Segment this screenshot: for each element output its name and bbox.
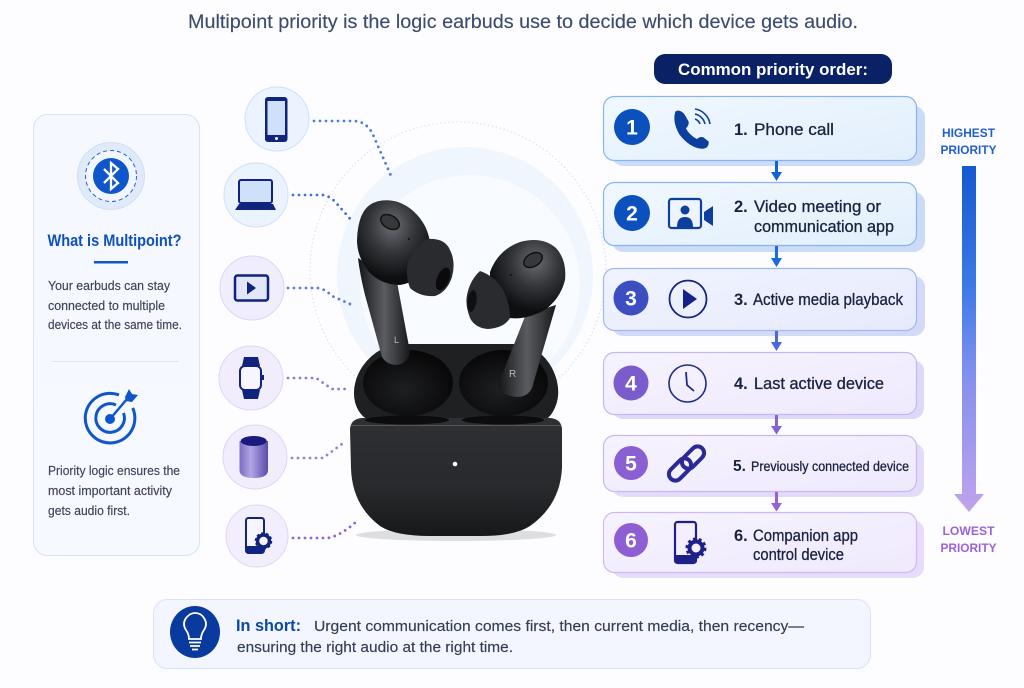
label: lowest priority: PRIORITY [940, 541, 996, 555]
card 1: phone call: 1 [626, 116, 638, 140]
left earbud: L [394, 335, 399, 345]
card 3: active media: 3 [625, 288, 637, 310]
card 3: active media [604, 268, 925, 336]
halo behind earbuds [310, 122, 606, 418]
text: multipoint description: devices at the same time. [48, 318, 182, 332]
card 5: previously connected: 5. [733, 458, 746, 475]
card 2: video meeting: communication app [754, 218, 894, 236]
icon: play [670, 280, 706, 318]
card 6: companion app: Companion app [753, 527, 858, 545]
card 5: previously connected: 5 [625, 452, 637, 476]
icon: app control [226, 505, 288, 567]
arrow 4-5 [771, 415, 782, 434]
card 5: previously connected [604, 436, 924, 497]
text: priority logic description: Priority logic ensures the [48, 464, 180, 478]
card 2: video meeting [604, 182, 925, 252]
right earbud: R [509, 369, 516, 380]
callout: in short: ensuring the right audio at the right time. [237, 640, 513, 656]
label: highest priority: PRIORITY [940, 143, 996, 157]
icon: app settings [675, 522, 705, 563]
right earbud [466, 240, 565, 397]
icon: light bulb [170, 606, 220, 658]
icon: link [666, 444, 707, 483]
case body [350, 416, 562, 536]
text: priority logic description: gets audio first. [48, 504, 130, 518]
case lid interior [354, 344, 558, 420]
case shadow [356, 529, 556, 541]
text: multipoint description [48, 279, 182, 332]
panel: what is multipoint [34, 114, 200, 556]
card 4: last active: 4 [625, 372, 637, 396]
dotted connectors [288, 121, 392, 538]
label: highest priority: HIGHEST [942, 126, 996, 140]
card 3: active media: Active media playback [753, 291, 904, 309]
card 1: phone call: 1. [734, 121, 748, 139]
text: priority logic description: most important activity [48, 484, 173, 498]
label: lowest priority [940, 524, 996, 555]
illustration: earbuds and case [350, 200, 565, 541]
callout: in short [154, 600, 870, 668]
card 1: phone call [604, 96, 925, 166]
card 1: phone call: Phone call [754, 121, 834, 139]
icon: video meeting [669, 199, 713, 228]
card 6: companion app [604, 512, 924, 578]
callout: in short: In short: [236, 617, 301, 635]
heading pill: common priority order: Common priority order: [678, 61, 868, 79]
card 6: companion app: 6. [734, 527, 748, 545]
left earbud [357, 200, 454, 365]
card 4: last active: 4. [734, 375, 748, 393]
card 2: video meeting: 2. [734, 198, 748, 216]
icon: phone call [675, 109, 710, 148]
card 6: companion app: control device [753, 546, 844, 564]
priority scale [940, 126, 996, 555]
icon: phone [245, 87, 309, 151]
label: highest priority [940, 126, 996, 157]
heading pill: common priority order [654, 54, 892, 84]
card 4: last active: Last active device [754, 375, 884, 393]
arrow: priority gradient [954, 166, 984, 512]
card 5: previously connected: Previously connected device [751, 458, 909, 474]
icon: bluetooth [78, 142, 144, 210]
device icons [219, 87, 309, 567]
label: lowest priority: LOWEST [942, 524, 995, 538]
card 2: video meeting: 2 [626, 202, 638, 226]
card 4: last active [604, 352, 924, 419]
arrow 5-6 [771, 492, 782, 512]
card 3: active media: 3. [734, 291, 748, 309]
arrow 2-3 [771, 246, 782, 267]
icon: watch [219, 346, 283, 410]
heading: what is multipoint: What is Multipoint? [48, 232, 182, 250]
card 2: video meeting: Video meeting or [754, 198, 882, 216]
title: Multipoint priority is the logic earbuds use to decide which device gets audio. [188, 11, 858, 33]
icon: clock [669, 365, 706, 402]
card 6: companion app: 6 [625, 530, 637, 552]
icon: tablet [220, 256, 284, 320]
icon: laptop [224, 163, 288, 227]
text: multipoint description: connected to multiple [48, 299, 165, 313]
text: priority logic description [48, 464, 180, 518]
callout: in short: Urgent communication comes first, then current media, then recency— [314, 619, 805, 635]
icon: speaker [223, 425, 287, 489]
icon: target [85, 389, 138, 443]
arrow 3-4 [771, 331, 782, 351]
arrow 1-2 [771, 161, 782, 181]
text: multipoint description: Your earbuds can stay [48, 279, 171, 293]
